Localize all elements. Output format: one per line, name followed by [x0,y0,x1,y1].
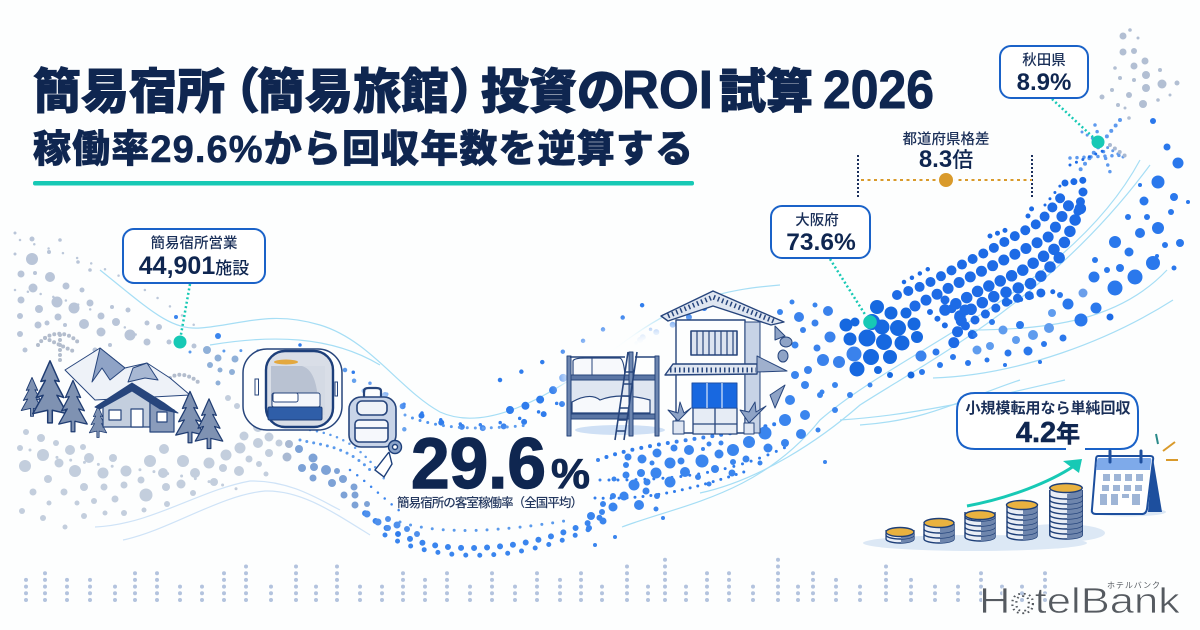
icon: backpack [349,388,396,447]
callout: facility count: 簡易宿所営業 [150,234,238,252]
icon: potted plants [668,402,766,434]
icon: bare tree [38,334,198,382]
illustration: machiya guesthouse [661,291,792,434]
logo: HotelBank: HotelBank [979,580,1181,621]
callout: facility count [123,229,265,348]
chart: coin stacks [863,484,1105,551]
range bracket: prefectural gap: 都道府県格差 [902,131,990,148]
icon: calendar [1090,451,1166,516]
callout: Akita: 8.9% [1017,69,1071,96]
big number: 29.6 [411,425,546,504]
big number: % [551,450,590,497]
stack 3 [965,510,995,541]
title: ） [449,66,497,119]
icon: pine trees [21,361,223,449]
logo: HotelBank: ホテルバンク [1107,581,1160,590]
dot wave: grey upper left [14,232,196,352]
title underline [33,181,694,186]
title: 2026 [823,60,934,120]
stack 4 [1006,500,1038,540]
icon: side shrubs [770,326,792,408]
map: grey northern dots [1100,28,1180,120]
title: 簡易旅館 [257,66,449,119]
title: 投資の [481,66,625,119]
white clearing behind illustrations [348,323,770,506]
arrow: growth [967,459,1082,506]
dot wave: grey lower left [17,422,293,530]
title: 試算 [719,65,813,118]
callout: Akita [1000,46,1104,148]
callout: Osaka: 大阪府 [795,212,839,229]
title: 簡易宿所 [33,66,225,119]
callout: payback period [957,393,1138,449]
dot wave: grey to blue transition [295,445,420,537]
map: Akita star dots [1070,120,1128,172]
callout: payback period: 小規模転用なら単純回収 [965,399,1131,417]
dot wave: small dots across bands [15,240,790,555]
title: ROI [622,60,713,120]
map: Japan prefecture dot map [794,118,1190,378]
light blue wave lines [95,160,1173,540]
title: （ [212,66,260,119]
dot wave: blue lower band cluster [586,300,872,547]
icon: sparkle ticks [1156,434,1178,460]
map: right scattered dots [919,118,1190,375]
callout: Osaka [771,206,877,329]
stack 2 [924,518,954,543]
illustration: bunk bed [567,352,665,440]
icon: cabin [95,383,178,432]
title [33,60,934,120]
icon: noren curtain [692,383,737,408]
illustration: mountains, cabin and trees [21,334,223,449]
callout: facility count: 44,901施設 [139,252,249,280]
dot wave: transition dots beside capsule [174,315,240,409]
illustration: capsule hotel pod [243,349,342,430]
callout: Osaka: 73.6% [786,229,856,256]
chart: bottom dotted rhythm bars [26,556,1045,600]
icon: mountains [65,348,190,400]
range bracket: prefectural gap: 8.3倍 [919,146,973,173]
range bracket: prefectural gap [858,131,1032,197]
callout: Akita: 秋田県 [1022,52,1066,69]
icon: key tag [375,440,402,477]
callout: payback period: 4.2年 [1016,417,1080,449]
big number caption: 簡易宿所の客室稼働率（全国平均） [397,495,583,510]
subtitle: 稼働率29.6%から回収年数を逆算する [33,129,693,171]
stack 1 [886,528,914,543]
map: Osaka cluster [794,300,926,378]
map: Honshu dots [897,180,1085,345]
stack 5 [1050,484,1082,539]
